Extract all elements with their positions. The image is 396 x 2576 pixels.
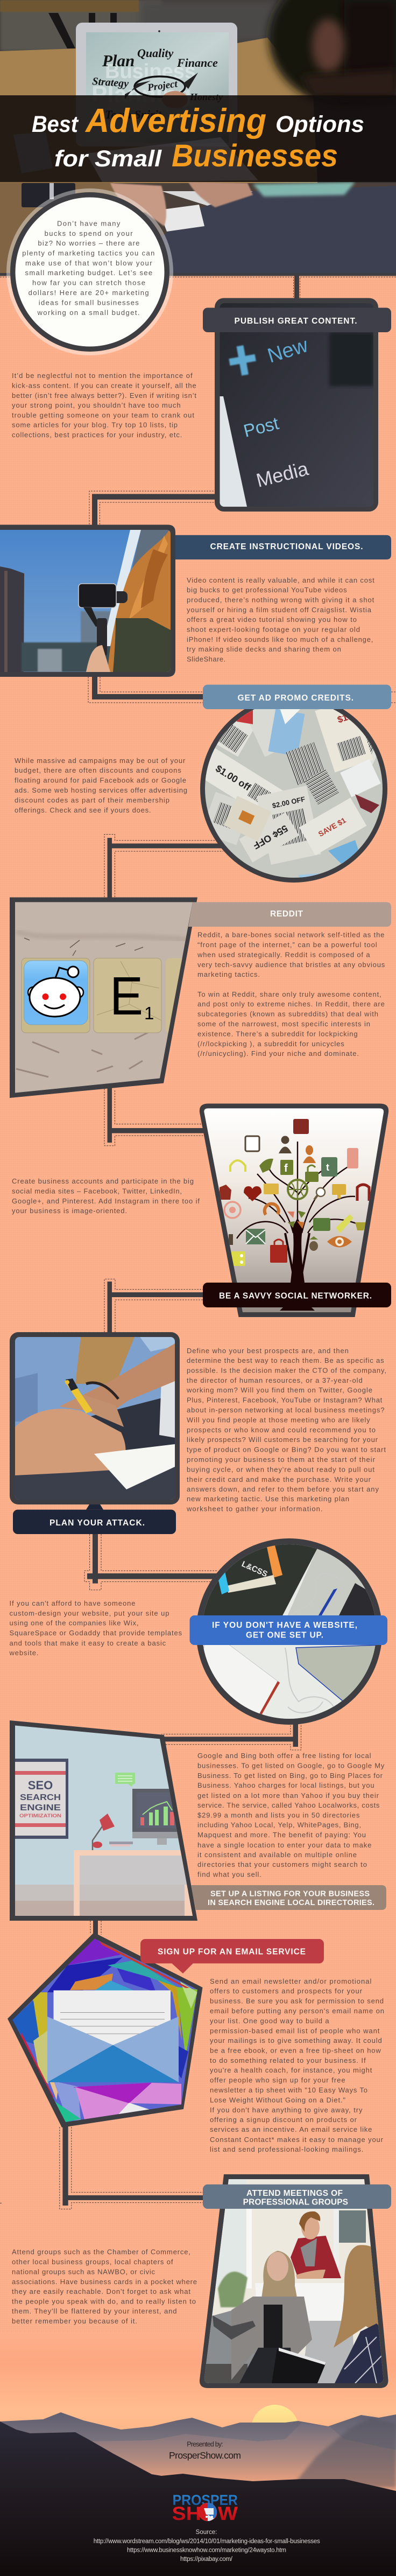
- sources: https://www.businessknowhow.com/marketing/24waysto.htm: [127, 2547, 286, 2553]
- text: website: using one of the companies like Wix,: [10, 1619, 139, 1627]
- text: search engine listing: Mapquest and more. The benefit of paying: You: [197, 1831, 366, 1839]
- text: email service: services as an incentive. An email service like: [210, 2125, 372, 2133]
- intro text: small marketing budget. Let’s see: [25, 269, 152, 277]
- text: email service: email before putting any person's email name on: [210, 2007, 384, 2015]
- panel: coupon circle photo: 55¢ OFF: [251, 823, 289, 851]
- presented by credit: ProsperShow.com: [169, 2450, 241, 2461]
- panel: social media tree: [200, 1104, 388, 1317]
- heading: set up a listing: [191, 1885, 386, 1910]
- text: social networker: social media sites – Facebook, Twitter, LinkedIn,: [12, 1187, 182, 1195]
- heading: attend meetings of professional groups: ATTEND MEETINGS OF: [246, 2189, 343, 2198]
- text: plan your attack: their credit card and make the purchase. Write your: [187, 1475, 371, 1483]
- text: search engine listing: $29.99 a month and lists you in 50 directories: [197, 1811, 360, 1819]
- text: search engine listing: Business. To get listed on Bing, go to Bing Places for: [197, 1772, 383, 1780]
- text: plan your attack: buying cycle, or when they're about ready to pull out: [187, 1466, 374, 1473]
- title text: Options: [275, 111, 364, 137]
- text: reddit: “front page of the internet,” can be a powerful tool: [197, 941, 377, 949]
- panel: publish great content photo: Post: [242, 413, 281, 441]
- text: social networker: Google+, and Pinterest. Add Instagram in there too if: [12, 1197, 200, 1205]
- text: publish great content: It’d be neglectful not to mention the importance of: [12, 372, 193, 380]
- panel: plan your attack photo: [10, 1332, 180, 1504]
- hero photo: laptop on a wooden desk: Plan: [102, 51, 135, 70]
- logo: prosper show: [172, 2492, 238, 2524]
- text: publish great content: kick-ass content. If you can create it yourself, all the: [12, 381, 196, 390]
- heading: publish great content: [203, 308, 391, 332]
- intro text: Don’t have many: [57, 220, 121, 228]
- heading: sign up for an email service: SIGN UP FOR AN EMAIL SERVICE: [158, 1947, 306, 1957]
- text: instructional videos: try making slide decks and sharing them on: [187, 645, 341, 653]
- panel: website circle photo: [196, 1538, 383, 1726]
- text: plan your attack: Define who your best prospects are, and then: [187, 1347, 349, 1355]
- text: reddit: and post only to extreme niches. In Reddit, there are: [197, 1000, 385, 1008]
- text: search engine listing: Google and Bing both offer a free listing for local: [197, 1752, 371, 1760]
- text: plan your attack: about in-person networking at local business meetings?: [187, 1406, 384, 1414]
- heading: plan your attack: [13, 1504, 176, 1534]
- text: publish great content: your strong point, you shouldn’t have too much: [12, 401, 181, 409]
- text: reddit: Reddit, a bare-bones social network self-titled as the: [197, 931, 384, 939]
- text: email service: newsletter a tip sheet with "10 Easy Ways To: [210, 2086, 367, 2094]
- heading: set up a listing: IN SEARCH ENGINE LOCAL DIRECTORIES.: [208, 1899, 374, 1907]
- text: plan your attack: [186, 1347, 386, 1513]
- text: search engine listing: service. The service, called Yahoo Localworks, costs: [197, 1801, 380, 1809]
- text: ad promo credits: While massive ad campaigns may be out of your: [15, 757, 186, 765]
- text: professional groups: they are easily reachable. Don't forget to ask what: [12, 2287, 190, 2295]
- panel: coupon circle photo: [200, 709, 387, 883]
- text: plan your attack: promoting your business to them at the start of their: [187, 1455, 376, 1464]
- title text: [32, 102, 364, 173]
- text: reddit: when used strategically. Reddit is composed of a: [197, 951, 370, 959]
- text: email service: your mailings is to give something away. It could: [210, 2036, 382, 2045]
- text: email service: to do something related to your business. If: [210, 2056, 366, 2064]
- text: ad promo credits: discount codes as part of their membership: [15, 796, 169, 804]
- text: website: custom-design your website, put your site up: [10, 1609, 169, 1617]
- connector: social to plan: [104, 1279, 204, 1334]
- panel: coupon circle photo: $1.00 off: [214, 763, 253, 793]
- text: email service: Lose Weight Without Going on a Diet.": [210, 2096, 345, 2104]
- icons on the tree: t: [326, 1162, 329, 1173]
- text: plan your attack: answers down, and refer to them before you start any: [187, 1485, 379, 1493]
- heading: get ad promo credits: GET AD PROMO CREDITS.: [238, 694, 353, 703]
- text: instructional videos: offers a great video tutorial showing you how to: [187, 615, 357, 624]
- text: website: [9, 1599, 182, 1657]
- title text: for Small: [54, 146, 162, 172]
- text: email service: you're a health coach, for instance, you might: [210, 2066, 372, 2074]
- hero photo: laptop on a wooden desk: Planning: [91, 81, 192, 108]
- text: instructional videos: SlideShare.: [187, 655, 225, 663]
- text: professional groups: other local business groups, local chapters of: [12, 2258, 173, 2266]
- text: publish great content: trouble getting someone on your team to crank out: [12, 411, 194, 419]
- heading: publish great content: PUBLISH GREAT CONTENT.: [235, 317, 357, 326]
- text: search engine listing: including Yahoo Local, Yelp, WhitePages, Bing,: [197, 1821, 361, 1829]
- text: plan your attack: Plus, Pinterest, Facebook, YouTube or Instagram? What: [187, 1396, 383, 1404]
- text: email service: offers to customers and prospects for your: [210, 1987, 363, 1995]
- text: reddit: existence. There’s a subreddit for lockpicking: [197, 1030, 358, 1038]
- text: instructional videos: shoot expert-looking footage on your regular old: [187, 626, 360, 633]
- intro text: working on a small budget.: [37, 309, 140, 317]
- panel: coupon circle photo: SAVE $1: [317, 816, 348, 838]
- text: website: SquareSpace or Godaddy that provide templates: [10, 1629, 182, 1637]
- hero photo: laptop on a wooden desk: Finance: [176, 56, 218, 69]
- hero photo: laptop on a wooden desk: [0, 0, 396, 273]
- heading: set up a listing: SET UP A LISTING FOR YOUR BUSINESS: [210, 1889, 370, 1898]
- text: publish great content: some articles for your blog. Try top 10 lists, tip: [12, 421, 178, 429]
- text: reddit: marketing tactics.: [197, 970, 260, 978]
- heading: create instructional videos: [175, 535, 391, 559]
- text: social networker: [12, 1177, 200, 1215]
- icon: E scrabble tile: [94, 958, 161, 1033]
- hero photo: laptop on a wooden desk: Honesty: [189, 92, 223, 102]
- text: instructional videos: big bucks to get professional YouTube videos: [187, 586, 347, 594]
- text: ad promo credits: ads. Some web hosting services offer advertising: [15, 786, 187, 794]
- connector: search listing to email: [90, 1921, 101, 1936]
- text: search engine listing: it consistent and available on multiple online: [197, 1851, 357, 1859]
- text: search engine listing: get listed on a lot more than Yahoo if you buy their: [197, 1791, 379, 1800]
- heading: be a savvy social networker: [203, 1283, 391, 1311]
- text: email service: your list. One good way to build a: [210, 2017, 329, 2025]
- text: search engine listing: have a single location to enter your data to make: [197, 1841, 371, 1849]
- presented by credit: [169, 2441, 241, 2461]
- heading: if you don't have a website: IF YOU DON'T HAVE A WEBSITE,: [212, 1621, 357, 1630]
- text: email service: permission-based email list of people who want: [210, 2027, 380, 2035]
- heading: attend meetings of professional groups: [203, 2185, 391, 2209]
- panel: publish great content photo: New: [265, 334, 311, 368]
- intro text: how far you can stretch those: [32, 279, 145, 286]
- text: search engine listing: Business. Yahoo charges for local listings, but you: [197, 1781, 374, 1789]
- panel: SEO desk illustration: SEO: [28, 1779, 53, 1792]
- hero bottom bar with dashed edge: [0, 273, 396, 300]
- heading: be a savvy social networker: BE A SAVVY SOCIAL NETWORKER.: [219, 1292, 372, 1301]
- intro text: make use of that won’t blow your: [25, 259, 152, 267]
- connector: email to meetings: [0, 2124, 204, 2209]
- connector: website to search listing: [161, 1723, 301, 1750]
- panel: publish great content photo: [215, 298, 378, 512]
- text: professional groups: national groups such as NAWBO, or civic: [12, 2267, 155, 2276]
- hero photo: laptop on a wooden desk: Team Spirit: [105, 108, 162, 121]
- panel: SEO desk illustration: ENGINE: [20, 1803, 61, 1812]
- text: search engine listing: businesses. To get listed on Google, go to Google My: [197, 1762, 385, 1769]
- connector: promo to reddit: [104, 835, 223, 899]
- tree: [237, 1142, 360, 1283]
- intro circle: [6, 188, 173, 355]
- text: plan your attack: working mom? Will you find them on Twitter, Google: [186, 1386, 372, 1394]
- panel: reddit tile photo: [10, 897, 198, 1098]
- text: instructional videos: iPhone! If video sounds like too much of a challenge,: [187, 635, 373, 643]
- text: ad promo credits: offerings. Check and see if yours does.: [15, 806, 151, 814]
- text: reddit: very tech-savvy audience that bristles at any obvious: [197, 961, 385, 969]
- footer: sunset mountain landscape: [0, 2405, 396, 2576]
- hero photo: laptop on a wooden desk: Business: [105, 60, 196, 83]
- text: instructional videos: Video content is really valuable, and while it can cost: [187, 576, 374, 584]
- text: instructional videos: yourself or hiring a film student off Craigslist. Wistia: [187, 606, 372, 614]
- panel: SEO desk illustration: OPTIMIZATION: [19, 1813, 61, 1818]
- heading: get ad promo credits: [203, 685, 391, 709]
- intro text: ideas for small businesses: [39, 298, 139, 307]
- title text: Best: [32, 111, 79, 137]
- text: social networker: your business is image-oriented.: [12, 1207, 127, 1215]
- text: professional groups: them. They'll be flattered by your interest, and: [12, 2307, 176, 2315]
- panel: publish great content photo: Media: [254, 457, 311, 492]
- presented by credit: Presented by:: [187, 2441, 223, 2448]
- heading: reddit: [188, 902, 391, 927]
- intro text: [22, 220, 154, 317]
- text: instructional videos: [187, 576, 374, 663]
- text: plan your attack: new marketing tactic. Use this marketing plan: [187, 1495, 349, 1503]
- heading: plan your attack: PLAN YOUR ATTACK.: [49, 1518, 145, 1528]
- text: email service: Constant Contact* makes it easy to manage your: [210, 2136, 384, 2144]
- text: search engine listing: find what you sell.: [197, 1871, 261, 1879]
- connector: plan to website: [84, 1534, 221, 1590]
- text: publish great content: [12, 372, 196, 439]
- icon: envelope with letter: [47, 1990, 179, 2082]
- connector: reddit to social: [104, 1082, 207, 1146]
- text: plan your attack: prospects or who know and could recommend you to: [187, 1426, 376, 1434]
- intro text: biz? No worries – there are: [38, 239, 139, 247]
- text: instructional videos: produced, there’s nothing wrong with giving it a shot: [187, 596, 374, 604]
- text: plan your attack: determine the best way to reach them. Be as specific as: [187, 1356, 384, 1364]
- text: publish great content: collections, best practices for your industry, etc.: [12, 431, 182, 439]
- text: professional groups: [12, 2248, 197, 2325]
- intro text: dollars! Here are 20+ marketing: [29, 289, 149, 297]
- intro text: bucks to spend on your: [45, 229, 133, 237]
- text: email service: If you don't have anything to give away, try: [210, 2106, 363, 2114]
- title text: Businesses: [172, 138, 338, 173]
- icon: E scrabble tile: 1: [144, 1003, 154, 1023]
- text: email service: [210, 1977, 384, 2153]
- text: reddit: To win at Reddit, share only truly awesome content,: [197, 990, 381, 998]
- logo: prosper show: PROSPER: [173, 2492, 238, 2508]
- text: plan your attack: the director of human resources, or a 37-year-old: [187, 1376, 363, 1384]
- text: website: website.: [9, 1649, 39, 1657]
- text: plan your attack: Will you find people at those meeting who are likely: [187, 1416, 370, 1424]
- heading: create instructional videos: CREATE INSTRUCTIONAL VIDEOS.: [210, 542, 363, 551]
- icon: reddit alien: [24, 961, 88, 1025]
- text: search engine listing: [197, 1752, 385, 1879]
- text: email service: offering a signup discount on products or: [210, 2116, 357, 2124]
- icon: E scrabble tile: E: [110, 966, 143, 1026]
- panel: SEO desk illustration: SEARCH: [20, 1793, 61, 1802]
- text: professional groups: Attend groups such as the Chamber of Commerce,: [12, 2248, 190, 2256]
- panel: email pentagon with envelope: [8, 1933, 203, 2127]
- sources: http://www.wordstream.com/blog/ws/2014/10/01/marketing-ideas-for-small-businesses: [94, 2538, 320, 2545]
- text: reddit: (/r/unicycling). Find your niche and dominate.: [197, 1049, 359, 1058]
- text: reddit: subcategories (known as subreddits) that deal with: [197, 1010, 378, 1018]
- hero photo: laptop on a wooden desk: Strategy: [92, 75, 129, 90]
- title text: Advertising: [84, 102, 266, 139]
- icons on the tree: f: [284, 1163, 288, 1174]
- text: publish great content: better (isn’t free always better?). Even if writing isn’t: [12, 391, 196, 400]
- panel: website circle photo: L&CSS: [240, 1559, 269, 1579]
- text: search engine listing: directories that your customers might search to: [197, 1860, 367, 1868]
- panel: coupon circle photo: $2.00 OFF: [271, 795, 306, 810]
- connector: video to promo: [88, 677, 396, 703]
- text: ad promo credits: floating around for paid Facebook ads or Google: [15, 776, 186, 784]
- title band: [0, 95, 396, 182]
- text: professional groups: associations. Have business cards in a pocket where: [12, 2278, 197, 2286]
- text: website: and tools that make it easy to create a basic: [10, 1639, 166, 1647]
- text: plan your attack: likely prospects? Will customers be searching for your: [187, 1436, 378, 1444]
- intro text: plenty of marketing tactics you can: [22, 249, 154, 257]
- text: email service: be a free ebook, or even a free tip-sheet on how: [210, 2046, 381, 2055]
- panel: SEO desk illustration: [10, 1720, 197, 1921]
- heading: attend meetings of professional groups: PROFESSIONAL GROUPS: [243, 2198, 348, 2207]
- text: email service: offer people who sign up for your free: [210, 2076, 345, 2084]
- panel: coupon circle photo: $1.00: [336, 708, 361, 725]
- text: reddit: some of the narrowest, most specific interests in: [197, 1020, 370, 1028]
- text: professional groups: better remember you because of it.: [12, 2317, 137, 2325]
- heading: sign up for an email service: [140, 1939, 324, 1973]
- logo: prosper show: SHOW: [172, 2503, 238, 2524]
- text: email service: business. Be sure you ask for permission to send: [210, 1997, 384, 2005]
- text: ad promo credits: [15, 757, 187, 814]
- heading: if you don't have a website: [189, 1615, 387, 1645]
- text: email service: Send an email newsletter and/or promotional: [210, 1977, 372, 1985]
- sources: https://pixabay.com/: [180, 2556, 233, 2563]
- text: professional groups: the people you speak with do, and to really listen to: [12, 2297, 196, 2305]
- text: website: If you can't afford to have someone: [10, 1599, 136, 1607]
- text: ad promo credits: budget, there are often discounts and coupons: [15, 766, 181, 774]
- hero photo: laptop on a wooden desk: Quality: [137, 46, 173, 60]
- sources: Source:: [196, 2529, 217, 2536]
- text: plan your attack: worksheet to gather your information.: [186, 1505, 323, 1513]
- text: plan your attack: type of product on Google or Bing? Do you want to start: [187, 1445, 386, 1453]
- text: reddit: [197, 931, 385, 1058]
- text: social networker: Create business accounts and participate in the big: [12, 1177, 194, 1185]
- text: email service: list and send professional-looking mailings.: [210, 2145, 363, 2153]
- sources: [94, 2529, 320, 2563]
- text: plan your attack: possible. Is the decision maker the CTO of the company,: [187, 1367, 386, 1374]
- panel: professional meeting photo: [200, 2174, 388, 2388]
- hero photo: laptop on a wooden desk: Project: [146, 78, 179, 94]
- heading: if you don't have a website: GET ONE SET UP.: [246, 1630, 323, 1640]
- text: reddit: (/r/lockpicking ), a subreddit for unicycles: [197, 1040, 344, 1048]
- heading: reddit: REDDIT: [270, 909, 303, 919]
- connector: publish to video: [89, 491, 218, 525]
- panel: instructional video photo: [0, 524, 175, 677]
- icons on the tree: [220, 1119, 369, 1266]
